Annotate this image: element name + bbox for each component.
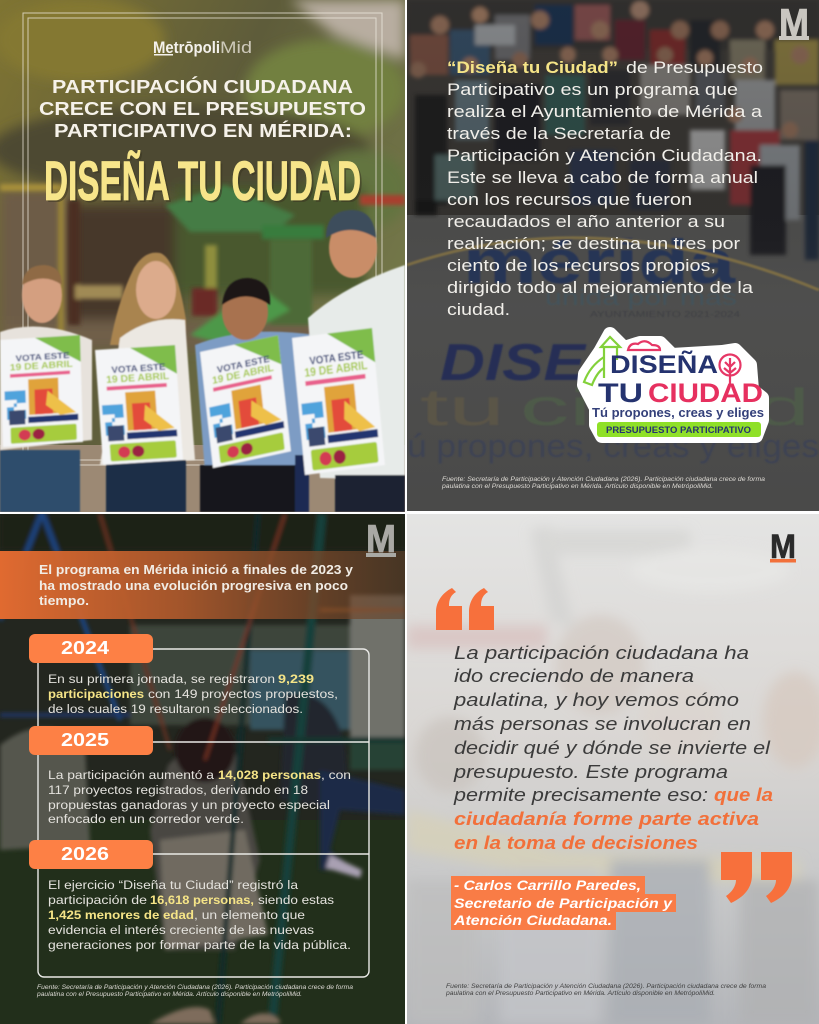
text 2025 bbox=[48, 768, 351, 826]
logo mark: M bbox=[366, 524, 396, 557]
panel: cover bbox=[0, 0, 410, 512]
logo: MetrōpoliMid: Mid bbox=[220, 39, 252, 57]
poster 4: 19 DE ABRIL bbox=[304, 359, 368, 380]
source note bbox=[36, 984, 353, 998]
quote text: ido creciendo de manera bbox=[454, 666, 694, 686]
logo mark: M bbox=[770, 534, 796, 562]
icon: opening quotes bbox=[436, 588, 494, 630]
body text: través de la Secretaría de bbox=[447, 125, 671, 143]
text 2026: evidencia el interés creciente de las nuevas bbox=[48, 923, 314, 937]
poster 4: VOTA ESTE bbox=[309, 349, 364, 368]
quote text: más personas se involucran en bbox=[454, 714, 751, 734]
text 2026: 1,425 menores de edad bbox=[48, 908, 194, 922]
poster 1 bbox=[0, 335, 83, 447]
text 2025: La participación aumentó a bbox=[48, 768, 214, 782]
source note: Fuente: Secretaría de Participación y Atención Ciudadana (2026). Participación ciudadana crece de forma bbox=[446, 983, 766, 990]
sticker logo: Diseña tu Ciudad: CIUDAD bbox=[648, 378, 763, 408]
poster 3: 19 DE ABRIL bbox=[212, 363, 274, 387]
text 2025: , con bbox=[321, 768, 351, 782]
title bbox=[39, 76, 366, 141]
icon: closing quotes bbox=[721, 852, 792, 903]
source note: paulatina con el Presupuesto Participativo en Mérida. Artículo disponible en MetrópoliMid. bbox=[36, 991, 302, 998]
quote text: paulatina, y hoy vemos cómo bbox=[453, 690, 739, 710]
quote text: que la bbox=[714, 785, 773, 805]
year 2026: 2026 bbox=[61, 844, 109, 864]
quote text: ciudadanía forme parte activa bbox=[454, 809, 759, 829]
text 2025: enfocado en un corredor verde. bbox=[48, 812, 244, 826]
logo mark: M bbox=[779, 8, 809, 40]
icon: green play tower bbox=[584, 337, 620, 385]
logo mark: M: M bbox=[366, 518, 396, 561]
background photo: faded crowd bbox=[407, 514, 819, 1024]
banner ghost text: mérida bbox=[463, 228, 736, 297]
body text: con los recursos que fueron bbox=[447, 191, 692, 209]
attribution bbox=[451, 876, 676, 930]
title: PARTICIPATIVO EN MÉRIDA: bbox=[54, 120, 352, 141]
outline box with dividers bbox=[38, 649, 369, 977]
body text: recaudados el año anterior a su bbox=[447, 213, 725, 231]
text 2025: propuestas ganadoras y un proyecto especial bbox=[48, 798, 330, 812]
intro text: El programa en Mérida inició a finales de 2023 y bbox=[39, 562, 354, 577]
logo mark: M: M bbox=[770, 528, 796, 566]
source note: paulatina con el Presupuesto Participativo en Mérida. Artículo disponible en MetrópoliMid. bbox=[441, 483, 713, 490]
year 2026 bbox=[29, 840, 153, 869]
source note bbox=[441, 476, 765, 490]
double frame bbox=[23, 13, 382, 465]
poster 2 bbox=[95, 345, 183, 465]
logo mark: M: M bbox=[779, 2, 809, 45]
poster 1: 19 DE ABRIL bbox=[10, 359, 73, 373]
title: PARTICIPACIÓN CIUDADANA bbox=[52, 76, 353, 97]
body text: realización; se destina un tres por bbox=[447, 235, 741, 253]
intro text: tiempo. bbox=[39, 593, 89, 608]
sticker logo: Diseña tu Ciudad: PRESUPUESTO PARTICIPATIVO bbox=[606, 425, 751, 435]
banner ghost text: ú propones, creas y eliges bbox=[407, 428, 819, 464]
banner ghost text: DISE bbox=[440, 334, 587, 392]
quote text: decidir qué y dónde se invierte el bbox=[454, 738, 771, 758]
body text: ciudad. bbox=[447, 301, 510, 319]
quote text: presupuesto. Este programa bbox=[453, 762, 728, 782]
banner ghost text: ciudad bbox=[520, 379, 810, 437]
background photo: crowd and floor banner bbox=[407, 0, 819, 511]
text 2026: 16,618 personas, bbox=[150, 893, 254, 907]
text 2024: En su primera jornada, se registraron bbox=[48, 672, 275, 686]
text 2026: generaciones por formar parte de la vida pública. bbox=[48, 938, 351, 952]
text 2024: con 149 proyectos propuestos, bbox=[148, 687, 338, 701]
body text: Este se lleva a cabo de forma anual bbox=[447, 169, 758, 187]
poster 3 bbox=[200, 335, 291, 468]
title: CRECE CON EL PRESUPUESTO bbox=[39, 99, 366, 119]
banner ghost text: tu bbox=[420, 379, 505, 437]
poster 1: VOTA ESTE bbox=[15, 350, 70, 363]
text 2024: participaciones bbox=[48, 687, 144, 701]
panel: timeline bbox=[0, 512, 405, 1024]
text 2026: , un elemento que bbox=[194, 908, 305, 922]
text 2025: 117 proyectos registrados, derivando en 18 bbox=[48, 783, 308, 797]
body text: Participación y Atención Ciudadana. bbox=[447, 147, 762, 165]
body text: dirigido todo al mejoramiento de la bbox=[447, 279, 754, 297]
attribution: Secretario de Participación y bbox=[454, 895, 673, 911]
panel: quote bbox=[407, 514, 819, 1024]
text 2026: participación de bbox=[48, 893, 147, 907]
intro text: ha mostrado una evolución progresiva en poco bbox=[39, 578, 348, 593]
body text: Participativo es un programa que bbox=[447, 81, 738, 99]
text 2024: 9,239 bbox=[278, 672, 314, 686]
panel: program description bbox=[407, 0, 819, 511]
heading: DISEÑA TU CIUDAD: DISEÑA TU CIUDAD bbox=[46, 151, 363, 214]
poster 3: VOTA ESTE bbox=[216, 354, 270, 375]
quote text: permite precisamente eso: bbox=[453, 785, 708, 805]
text 2026 bbox=[48, 878, 351, 952]
banner ghost text: AYUNTAMIENTO 2021-2024 bbox=[590, 310, 741, 319]
sticker logo: Diseña tu Ciudad bbox=[584, 334, 764, 437]
body text bbox=[447, 59, 763, 319]
intro text bbox=[39, 562, 354, 608]
year 2024 bbox=[29, 634, 153, 663]
icon: tree in circle bbox=[720, 354, 740, 386]
icon: cloud bbox=[628, 341, 660, 350]
attribution: Atención Ciudadana. bbox=[453, 912, 612, 928]
source note: Fuente: Secretaría de Participación y Atención Ciudadana (2026). Participación ciudadana crece de forma bbox=[37, 984, 353, 991]
year 2024: 2024 bbox=[61, 638, 109, 658]
logo: MetrōpoliMid: Metrōpoli bbox=[153, 39, 220, 57]
banner ghost text: unida por más bbox=[545, 285, 737, 310]
orange band bbox=[0, 551, 405, 619]
source note: Fuente: Secretaría de Participación y Atención Ciudadana (2026). Participación ciudadana crece de forma bbox=[442, 476, 765, 483]
banner ghost text bbox=[407, 228, 819, 464]
heading: DISEÑA TU CIUDAD: DISEÑA TU CIUDAD bbox=[44, 149, 361, 212]
source note bbox=[445, 983, 766, 997]
background photo: children on swings bbox=[0, 512, 405, 1024]
poster 2: 19 DE ABRIL bbox=[106, 371, 170, 386]
photo: four people holding posters bbox=[0, 210, 405, 512]
poster 2: VOTA ESTE bbox=[111, 362, 166, 375]
sticker logo: Diseña tu Ciudad: Tú propones, creas y eliges bbox=[592, 405, 764, 420]
text 2026: siendo estas bbox=[258, 893, 334, 907]
quote text: La participación ciudadana ha bbox=[454, 643, 749, 663]
body text: realiza el Ayuntamiento de Mérida a bbox=[447, 103, 763, 121]
body text: “Diseña tu Ciudad” bbox=[447, 59, 618, 77]
body text: ciento de los recursos propios, bbox=[447, 257, 716, 275]
logo: MetrōpoliMid bbox=[154, 41, 251, 56]
year 2025 bbox=[29, 726, 153, 755]
poster 4 bbox=[292, 328, 385, 475]
background photo: park and playground bbox=[0, 0, 410, 512]
attribution: - Carlos Carrillo Paredes, bbox=[454, 877, 641, 893]
text 2024 bbox=[48, 674, 337, 713]
body text: de Presupuesto bbox=[626, 59, 763, 77]
text 2026: El ejercicio “Diseña tu Ciudad” registró la bbox=[48, 878, 298, 892]
year 2025: 2025 bbox=[61, 730, 109, 750]
quote text bbox=[453, 643, 773, 853]
source note: paulatina con el Presupuesto Participativo en Mérida. Artículo disponible en MetrópoliMid. bbox=[445, 990, 715, 997]
text 2024: de los cuales 19 resultaron seleccionados. bbox=[48, 702, 303, 716]
sticker logo: Diseña tu Ciudad: DISEÑA bbox=[610, 349, 718, 379]
text 2025: 14,028 personas bbox=[218, 768, 321, 782]
heading: DISEÑA TU CIUDAD bbox=[46, 150, 362, 202]
quote text: en la toma de decisiones bbox=[454, 833, 698, 853]
sticker logo: Diseña tu Ciudad: TU bbox=[598, 378, 643, 408]
